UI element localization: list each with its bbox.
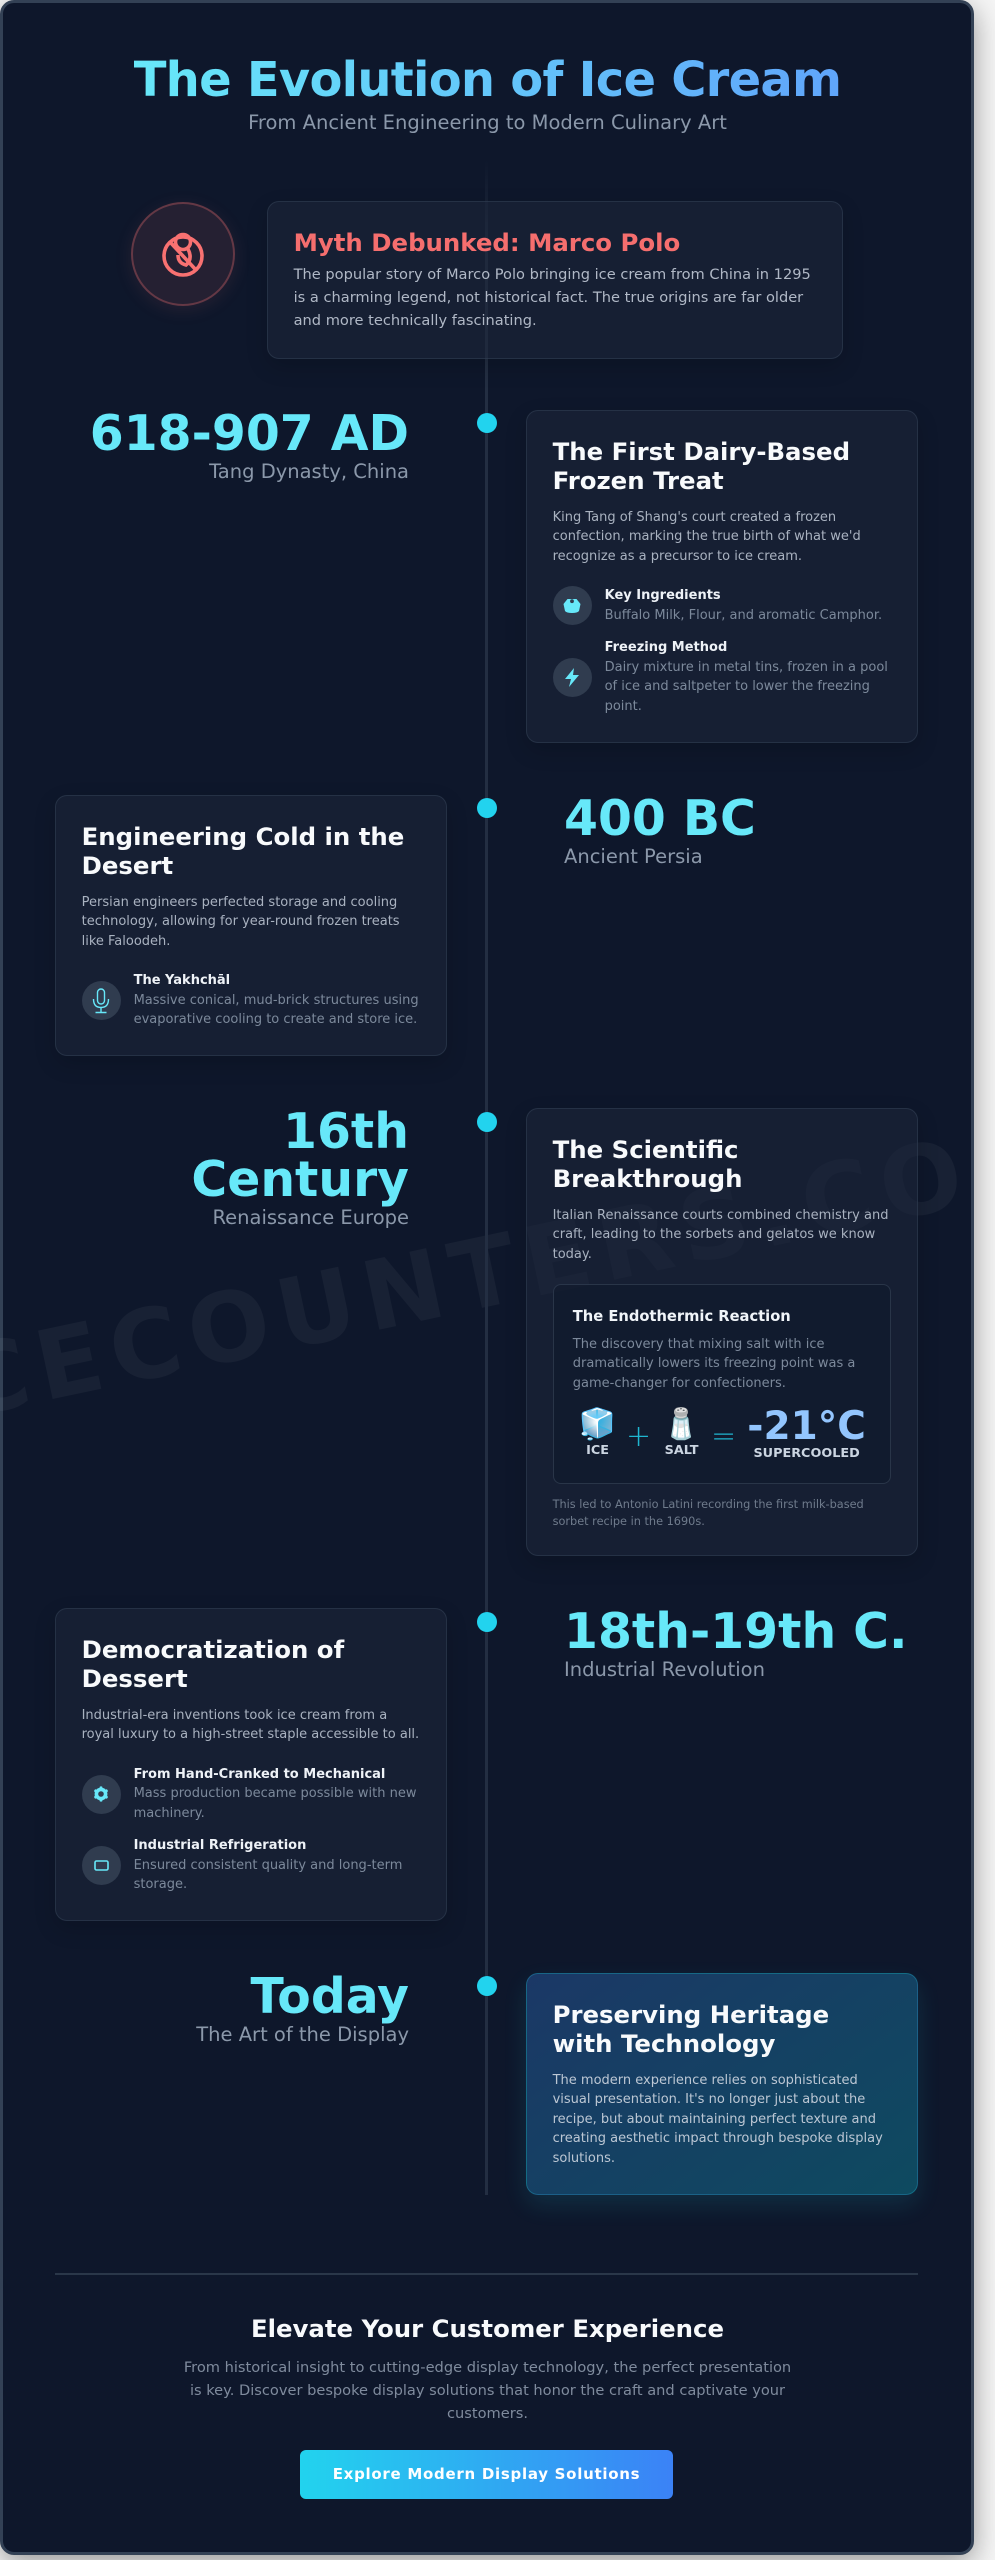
- item: refrigeration: Ensured consistent quality and long-term: [134, 1858, 402, 1873]
- date: Renaissance: [191, 1103, 409, 1229]
- call to action text: From historical insight to cutting-edge display technology, the perfect presentation: [184, 2359, 791, 2376]
- timeline dot: [477, 1112, 497, 1132]
- heading: Preserving Heritage: [553, 2000, 829, 2029]
- date: Renaissance: 16th: [283, 1103, 409, 1160]
- text: craft, leading to the sorbets and gelatos we know: [553, 1227, 875, 1242]
- heading: The First Dairy-Based: [553, 437, 850, 466]
- text: King Tang of Shang's court created a frozen: [553, 510, 836, 525]
- timeline dot: [477, 413, 497, 433]
- text: visual presentation. It's no longer just about the: [553, 2092, 865, 2107]
- item: yakhchal: The Yakhchāl: [134, 973, 230, 988]
- text: myth: [294, 266, 811, 329]
- text: The modern experience relies on sophisticated: [553, 2073, 858, 2088]
- text: technology, allowing for year-round frozen treats: [82, 914, 400, 929]
- text: Italian Renaissance courts combined chemistry and: [553, 1208, 888, 1223]
- item: yakhchal: Massive conical, mud-brick structures using: [134, 993, 419, 1008]
- text: today.: [553, 1247, 592, 1262]
- date: Renaissance: Century: [191, 1151, 409, 1208]
- panel: endothermic reaction: [553, 1284, 891, 1484]
- text: solutions.: [553, 2151, 615, 2166]
- footnote: This led to Antonio Latini recording the first milk-based: [553, 1498, 864, 1511]
- text: The discovery that mixing salt with ice: [573, 1337, 824, 1352]
- icon: salt: 🧂: [663, 1407, 700, 1442]
- panel: engineering cold: [55, 795, 447, 1056]
- panel: democratization of dessert: [55, 1608, 447, 1921]
- text: confection, marking the true birth of what we'd: [553, 529, 861, 544]
- text: dramatically lowers its freezing point was a: [573, 1356, 855, 1371]
- call to action text: customers.: [447, 2405, 528, 2422]
- text: [552, 2073, 883, 2166]
- timeline dot: [477, 798, 497, 818]
- panel: myth debunked: [267, 201, 843, 359]
- timeline dot: [477, 1976, 497, 1996]
- item: key ingredients: Buffalo Milk, Flour, and aromatic Camphor.: [605, 608, 882, 623]
- text: myth: The popular story of Marco Polo bringing ice cream from China in 1295: [294, 266, 811, 283]
- timeline dot: [477, 1612, 497, 1632]
- heading: [82, 822, 404, 880]
- icon: myth no ice cream: [131, 202, 235, 306]
- text: Persian engineers perfected storage and cooling: [82, 895, 397, 910]
- call to action heading: Elevate Your Customer Experience: [251, 2314, 724, 2343]
- heading: [552, 1135, 742, 1193]
- item: refrigeration: [82, 1838, 402, 1892]
- item: freezing method: of ice and saltpeter to lower the freezing: [605, 679, 870, 694]
- date: today: Today: [250, 1968, 409, 2025]
- date: Persia: 400 BC: [564, 790, 756, 847]
- text: [572, 1337, 855, 1391]
- text: [553, 510, 861, 564]
- item: mechanical: Mass production became possible with new: [134, 1786, 416, 1801]
- text: Industrial-era inventions took ice cream from a: [82, 1708, 387, 1723]
- heading: with Technology: [553, 2029, 775, 2058]
- panel: first dairy-based frozen treat: [526, 410, 918, 743]
- heading: Dessert: [82, 1664, 188, 1693]
- text: [82, 1708, 419, 1742]
- text: myth: is a charming legend, not historical fact. The true origins are far older: [294, 289, 803, 306]
- date: Persia: Ancient Persia: [564, 845, 703, 868]
- date: Industrial Revolution: Industrial Revolution: [564, 1658, 765, 1681]
- heading: [553, 2000, 829, 2058]
- text: royal luxury to a high-street staple accessible to all.: [82, 1727, 419, 1742]
- label: supercooled: SUPERCOOLED: [753, 1446, 860, 1461]
- panel: preserving heritage: [526, 1973, 918, 2195]
- button: [300, 2450, 673, 2499]
- heading: [82, 1635, 344, 1693]
- heading: [552, 437, 850, 495]
- items: [553, 586, 888, 714]
- item: key ingredients: Key Ingredients: [605, 588, 721, 603]
- date: Tang Dynasty: Tang Dynasty, China: [209, 460, 409, 483]
- text: like Faloodeh.: [82, 934, 170, 949]
- footnote: [552, 1498, 864, 1528]
- date: Industrial Revolution: 18th-19th C.: [564, 1603, 908, 1660]
- heading: The Scientific: [553, 1135, 738, 1164]
- sub-heading: The Endothermic Reaction: [573, 1308, 791, 1325]
- button: Explore Modern Display Solutions: [333, 2465, 640, 2483]
- item: refrigeration: Industrial Refrigeration: [134, 1838, 306, 1853]
- item: mechanical: machinery.: [134, 1806, 205, 1821]
- text: [82, 895, 400, 949]
- label: ice: ICE: [586, 1443, 609, 1458]
- item: mechanical: [82, 1767, 416, 1821]
- text: creating aesthetic impact through bespoke display: [553, 2131, 883, 2146]
- plus sign: +: [626, 1419, 651, 1454]
- item: freezing method: point.: [605, 699, 642, 714]
- date: today: [196, 1968, 409, 2046]
- heading: Democratization of: [82, 1635, 344, 1664]
- text: myth: and more technically fascinating.: [294, 312, 537, 329]
- footnote: sorbet recipe in the 1690s.: [553, 1515, 705, 1528]
- text: [553, 1208, 888, 1262]
- item: key ingredients: [553, 586, 882, 625]
- item: freezing method: Freezing Method: [605, 640, 727, 655]
- title: The Evolution of Ice Cream: [134, 52, 841, 108]
- item: yakhchal: [82, 973, 419, 1027]
- icon: ice: 🧊: [579, 1407, 616, 1442]
- text: game-changer for confectioners.: [573, 1376, 786, 1391]
- panel: scientific breakthrough: [526, 1108, 918, 1556]
- date: today: The Art of the Display: [196, 2023, 409, 2046]
- date: Renaissance: Renaissance Europe: [212, 1206, 409, 1229]
- items: [82, 973, 419, 1027]
- heading: Engineering Cold in the: [82, 822, 404, 851]
- equals sign: =: [711, 1419, 736, 1454]
- heading: Breakthrough: [553, 1164, 742, 1193]
- item: mechanical: From Hand-Cranked to Mechanical: [134, 1767, 385, 1782]
- item: freezing method: Dairy mixture in metal tins, frozen in a pool: [605, 660, 888, 675]
- heading: Frozen Treat: [553, 466, 724, 495]
- item: refrigeration: storage.: [134, 1877, 187, 1892]
- label: salt: SALT: [665, 1443, 699, 1458]
- heading: myth: Myth Debunked: Marco Polo: [294, 228, 680, 257]
- timeline line: [485, 160, 488, 2195]
- call to action text: is key. Discover bespoke display solutions that honor the craft and captivate your: [190, 2382, 785, 2399]
- item: yakhchal: evaporative cooling to create and store ice.: [134, 1012, 417, 1027]
- date: Tang Dynasty: 618-907 AD: [90, 405, 409, 462]
- temperature value: -21°C: [747, 1404, 866, 1449]
- heading: Desert: [82, 851, 173, 880]
- text: recognize as a precursor to ice cream.: [553, 549, 802, 564]
- subtitle: From Ancient Engineering to Modern Culinary Art: [248, 111, 727, 134]
- items: [82, 1767, 416, 1892]
- call to action text: [184, 2359, 791, 2422]
- text: recipe, but about maintaining perfect texture and: [553, 2112, 876, 2127]
- item: freezing method: [553, 640, 888, 714]
